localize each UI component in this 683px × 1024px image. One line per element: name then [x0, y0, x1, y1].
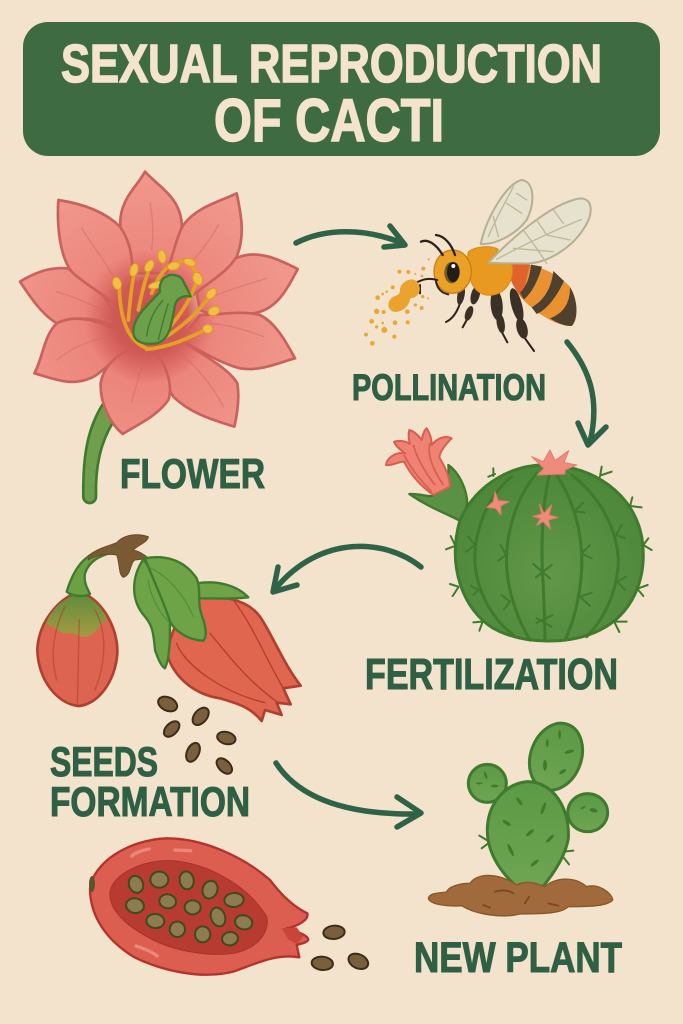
arrow: seeds to new plant: [276, 763, 421, 827]
plant side spines: [479, 836, 573, 864]
cactus ribs: [475, 473, 618, 640]
cactus spines behind: [446, 467, 652, 632]
label: fertilization: FERTILIZATION: [365, 650, 618, 699]
fruit inner cavity: [110, 861, 267, 954]
petal veins: [57, 203, 267, 407]
fruit end scar: [89, 876, 95, 892]
pistil: [133, 275, 191, 344]
stamens: [111, 249, 221, 349]
arrow: fertilization to seeds: [273, 546, 421, 592]
label: seeds formation: SEEDS: [50, 738, 158, 785]
seeds in fruit: [125, 870, 254, 947]
icon: new plant: [428, 716, 613, 916]
bee back wing: [481, 180, 532, 244]
fruit branch: [88, 535, 148, 577]
left pad: [468, 764, 506, 802]
label: new plant: NEW PLANT: [414, 934, 622, 982]
bee abdomen: [509, 264, 576, 326]
fruit outer skin: [90, 838, 308, 975]
icon: bee: [364, 180, 591, 351]
pollen clump: [388, 280, 420, 312]
arrow: pollination to fertilization: [567, 342, 606, 445]
label: flower: FLOWER: [120, 450, 265, 497]
bee head: [414, 235, 471, 294]
right fruit: [168, 597, 301, 721]
right fruit leaves: [134, 557, 248, 668]
icon: barrel cactus: [386, 428, 652, 641]
title banner: [23, 22, 660, 156]
bee legs: [446, 285, 534, 351]
bee thorax: [468, 247, 513, 295]
flower stem: [83, 403, 113, 503]
pollen dots: [364, 258, 430, 346]
label: seeds formation: FORMATION: [50, 778, 250, 825]
soil mound: [428, 875, 613, 916]
cactus body flowers: [487, 450, 577, 529]
cactus side flower: [386, 428, 467, 522]
pad markings: [476, 730, 598, 867]
icon: cactus fruits: [37, 535, 301, 777]
bee front wing: [488, 198, 591, 263]
petals: [20, 172, 298, 434]
cactus body: [455, 465, 643, 641]
icon: flower: [20, 172, 298, 503]
top pad: [520, 716, 592, 798]
label: seeds formation: [50, 738, 250, 825]
icon: cut fruit: [89, 838, 371, 975]
title line 2: OF CACTI: [214, 87, 444, 154]
label: pollination: POLLINATION: [352, 367, 546, 408]
right pad: [568, 794, 608, 832]
fruit tip detail: [282, 927, 303, 944]
cactus spines: [466, 503, 626, 627]
flower centre shading: [83, 250, 217, 383]
arrow: flower to pollination: [296, 226, 405, 247]
fruit highlights: [132, 849, 191, 956]
falling seeds: [156, 694, 237, 777]
main pad: [487, 782, 568, 890]
loose seeds: [311, 925, 371, 972]
left fruit: [37, 544, 135, 706]
